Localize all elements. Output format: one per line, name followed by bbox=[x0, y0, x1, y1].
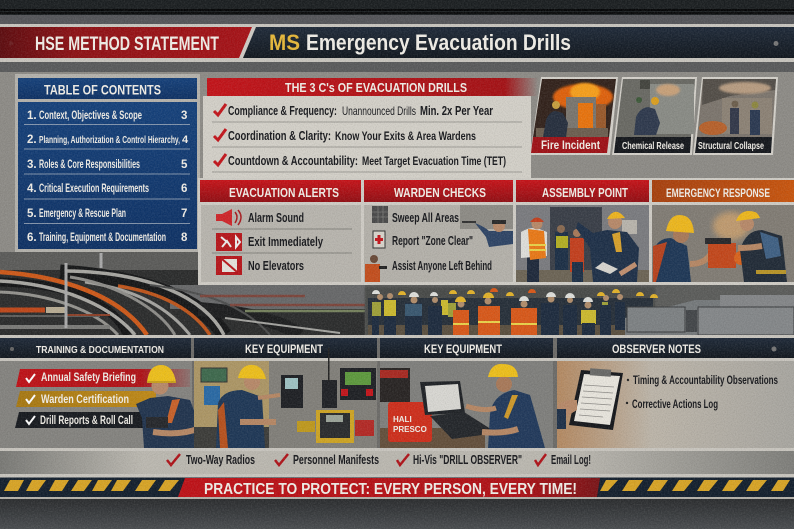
icon: clipboard bbox=[557, 368, 623, 430]
heading: table of contents: TABLE OF CONTENTS bbox=[44, 82, 161, 98]
hazard stripes right bbox=[600, 480, 790, 491]
text: report zone clear: Report "Zone Clear" bbox=[392, 234, 473, 248]
toc entries: 2. bbox=[27, 134, 37, 146]
panel: evacuation alerts bbox=[198, 178, 794, 285]
hazard stripes left bbox=[4, 480, 179, 491]
panel: cables and crowd strip bbox=[0, 252, 794, 335]
item: email log bbox=[535, 453, 591, 467]
item: coordination bbox=[214, 128, 476, 143]
banner: practice to protect: PRACTICE TO PROTECT: EVERY PERSON, EVERY TIME! bbox=[204, 481, 577, 498]
ribbon: warden certification bbox=[16, 391, 156, 407]
toc entries bbox=[27, 110, 189, 244]
heading: training and documentation: TRAINING & DOCUMENTATION bbox=[36, 344, 164, 356]
panel: key equipment two bbox=[380, 338, 553, 448]
header: navy title bar bbox=[0, 27, 794, 58]
heading: evacuation alerts bbox=[200, 180, 361, 202]
item: countdown: Meet Target Evacuation Time (TET) bbox=[362, 154, 506, 168]
illustration: cables bbox=[0, 253, 365, 335]
heading: the 3 Cs bbox=[207, 78, 538, 96]
panel: emergency response bbox=[652, 180, 794, 282]
item: personnel manifests bbox=[275, 453, 379, 467]
figure: worker right bbox=[736, 211, 787, 282]
heading: emergency response bbox=[652, 180, 794, 202]
toc entries: 4. bbox=[27, 183, 37, 195]
toc entries: 3. bbox=[27, 159, 37, 171]
illustration: steel skip bbox=[625, 295, 794, 335]
ribbon: drill reports: Drill Reports & Roll Call bbox=[40, 415, 133, 427]
photo: structural collapse: Structural Collapse bbox=[698, 140, 764, 152]
figure: worker with radio bbox=[136, 365, 203, 448]
photo: structural collapse bbox=[693, 77, 778, 155]
toc entries: Critical Execution Requirements bbox=[39, 183, 149, 195]
icon: first aid bbox=[373, 231, 385, 248]
header: red label bbox=[0, 27, 256, 58]
figure: people at door bbox=[555, 225, 584, 282]
heading: key equipment two: KEY EQUIPMENT bbox=[424, 344, 502, 356]
banner: practice to protect bbox=[0, 476, 794, 499]
item: compliance: Min. 2x Per Year bbox=[420, 103, 493, 118]
heading: training and documentation bbox=[0, 338, 191, 358]
photo: fire incident: Fire Incident bbox=[541, 140, 600, 152]
toc entries: 7 bbox=[181, 208, 187, 220]
panel: assembly point bbox=[516, 180, 649, 282]
heading: key equipment one bbox=[194, 338, 377, 358]
figure: equipment worker bbox=[216, 365, 280, 448]
item: coordination: Know Your Exits & Area Wardens bbox=[335, 129, 476, 143]
figure: warden in vest bbox=[521, 218, 547, 282]
icon: rescuer bbox=[365, 255, 387, 282]
photo: chemical release bbox=[612, 77, 697, 155]
item: countdown: Countdown & Accountability: bbox=[228, 153, 358, 168]
ribbon: annual safety briefing bbox=[16, 369, 190, 387]
figure: warden pointing bbox=[462, 220, 513, 247]
item: coordination: Coordination & Clarity: bbox=[228, 128, 331, 143]
icon: exit bbox=[216, 233, 242, 251]
heading: warden checks: WARDEN CHECKS bbox=[394, 185, 486, 200]
item: two-way radios: Two-Way Radios bbox=[186, 453, 255, 467]
figure: worker at laptop bbox=[466, 364, 545, 448]
panel: observer notes bbox=[557, 338, 794, 448]
item: compliance: Unannounced Drills bbox=[342, 104, 416, 118]
heading: the 3 Cs: THE 3 C's OF EVACUATION DRILLS bbox=[285, 80, 467, 95]
item: compliance: Compliance & Frequency: bbox=[228, 103, 337, 118]
checklist row bbox=[0, 451, 794, 477]
toc entries: 8 bbox=[181, 232, 188, 244]
heading: key equipment one: KEY EQUIPMENT bbox=[245, 344, 323, 356]
toc entries: 5. bbox=[27, 208, 37, 220]
toc entries: Training, Equipment & Documentation bbox=[39, 232, 166, 244]
panel: warden checks bbox=[364, 180, 513, 282]
icon: red case bbox=[388, 402, 432, 442]
ribbon: drill reports bbox=[15, 412, 150, 428]
panel: training and documentation bbox=[0, 335, 794, 451]
toc entries: 6. bbox=[27, 232, 37, 244]
toc entries: 1. bbox=[27, 110, 37, 122]
text: assist anyone: Assist Anyone Left Behind bbox=[392, 259, 492, 273]
toc entries: 5 bbox=[181, 159, 188, 171]
ribbon: warden certification: Warden Certification bbox=[41, 394, 129, 406]
toc entries: 3 bbox=[181, 110, 187, 122]
panel: the 3 Cs bbox=[203, 78, 538, 178]
toc entries: Roles & Core Responsibilities bbox=[39, 159, 140, 171]
item: hi-vis observer: Hi-Vis "DRILL OBSERVER" bbox=[413, 453, 522, 467]
item: countdown bbox=[214, 153, 506, 168]
icon: no elevators bbox=[216, 256, 242, 275]
item: two-way radios bbox=[167, 453, 255, 467]
figure: worker left bbox=[653, 215, 710, 282]
header: navy title bar: Emergency Evacuation Drills bbox=[306, 30, 571, 55]
toc entries: Context, Objectives & Scope bbox=[39, 110, 142, 122]
icon: alarm speaker bbox=[216, 209, 241, 226]
item: hi-vis observer bbox=[397, 453, 522, 467]
heading: evacuation alerts: EVACUATION ALERTS bbox=[229, 185, 339, 200]
panel: table of contents bbox=[15, 74, 200, 252]
heading: warden checks bbox=[364, 180, 513, 202]
panel: key equipment one bbox=[194, 338, 377, 448]
heading: assembly point: ASSEMBLY POINT bbox=[542, 185, 628, 200]
text: observer bullets bbox=[626, 373, 778, 411]
icon: laptop bbox=[420, 381, 497, 439]
item: personnel manifests: Personnel Manifests bbox=[293, 453, 379, 467]
header: navy title bar: MS bbox=[269, 30, 300, 55]
text: sweep all areas: Sweep All Areas bbox=[392, 211, 459, 225]
heading: key equipment two bbox=[380, 338, 553, 358]
photo: chemical release: Chemical Release bbox=[622, 140, 684, 152]
icon: red case: PRESCO bbox=[393, 425, 427, 434]
illustration: crowd of workers bbox=[365, 287, 658, 335]
text: alarm sound: Alarm Sound bbox=[248, 211, 304, 225]
photo: fire incident bbox=[530, 77, 618, 155]
icon: radios and meters bbox=[281, 348, 376, 443]
heading: table of contents bbox=[18, 78, 197, 99]
toc entries: Emergency & Rescue Plan bbox=[39, 208, 126, 220]
icon: red case: HALI bbox=[393, 415, 412, 424]
heading: observer notes: OBSERVER NOTES bbox=[612, 344, 701, 356]
item: compliance bbox=[214, 103, 493, 118]
item: email log: Email Log! bbox=[551, 453, 591, 467]
heading: observer notes bbox=[557, 338, 794, 358]
toc entries: 6 bbox=[181, 183, 187, 195]
icon: floor plan bbox=[372, 206, 388, 223]
figure: equipment bbox=[705, 238, 748, 268]
ribbon: annual safety briefing: Annual Safety Briefing bbox=[41, 372, 136, 384]
text: exit immediately: Exit Immediately bbox=[248, 235, 323, 249]
text: observer bullets: Corrective Actions Log bbox=[632, 397, 718, 411]
toc entries: 4 bbox=[182, 134, 189, 146]
header band bbox=[0, 24, 794, 62]
toc entries: Planning, Authorization & Control Hierarchy, bbox=[39, 134, 180, 146]
figure: worker with helmet bbox=[576, 212, 639, 282]
header: red label: HSE METHOD STATEMENT bbox=[35, 33, 219, 55]
text: no elevators: No Elevators bbox=[248, 259, 304, 273]
